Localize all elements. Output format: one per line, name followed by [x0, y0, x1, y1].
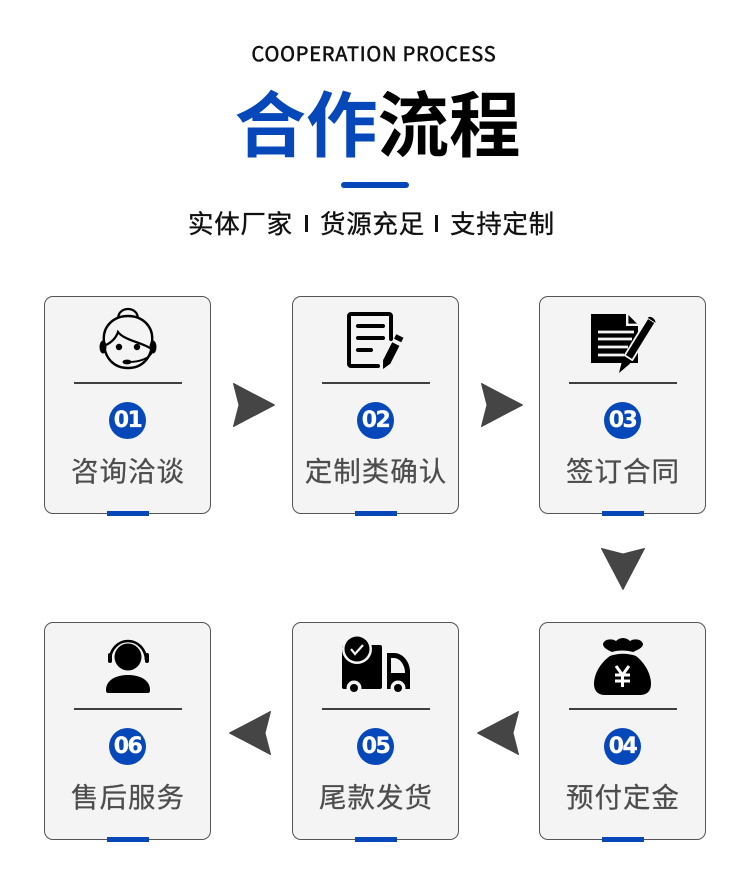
label: 咨询洽谈: [71, 449, 185, 489]
subtitle: [188, 204, 555, 241]
number badge 01: 01: [114, 408, 141, 433]
subtitle: 货源充足: [320, 204, 425, 241]
number badge 02: [357, 402, 394, 439]
panel: step 05 final payment: [292, 622, 459, 840]
number badge 05: 05: [362, 734, 389, 759]
number badge 02: 02: [362, 408, 389, 433]
accent bar: [107, 837, 149, 842]
english heading: COOPERATION PROCESS: [252, 38, 496, 67]
icon: support agent: [106, 640, 150, 693]
label: 售后服务: [71, 775, 185, 815]
accent bar: [107, 511, 149, 516]
icon: document and pen: [347, 312, 404, 369]
number badge 05: [357, 728, 394, 765]
icon: customer service woman: [100, 308, 156, 370]
accent bar: [602, 511, 644, 516]
title: 合作流程: [234, 68, 521, 172]
label: 签订合同: [566, 449, 680, 489]
label: 尾款发货: [319, 775, 433, 815]
icon: contract and pen: [591, 314, 656, 373]
panel: step 03 sign contract: [539, 296, 706, 514]
number badge 01: [109, 402, 146, 439]
label: 定制类确认: [305, 449, 447, 489]
number badge 06: 06: [114, 734, 141, 759]
arrow: left: [477, 711, 519, 755]
accent bar: [355, 837, 397, 842]
number badge 04: 04: [609, 734, 636, 759]
icon: delivery truck: [342, 636, 410, 692]
arrow: down: [601, 548, 645, 590]
subtitle: 实体厂家: [188, 204, 293, 241]
number badge 03: 03: [609, 408, 636, 433]
panel: step 02 customization: [292, 296, 459, 514]
icon: money bag: [594, 638, 651, 695]
number badge 04: [604, 728, 641, 765]
arrow: left: [229, 711, 271, 755]
panel: step 01 consultation: [44, 296, 211, 514]
label: 预付定金: [566, 775, 680, 815]
number badge 03: [604, 402, 641, 439]
arrow: right: [481, 383, 523, 427]
accent bar: [355, 511, 397, 516]
number badge 06: [109, 728, 146, 765]
arrow: right: [233, 383, 275, 427]
panel: step 06 after-sales: [44, 622, 211, 840]
accent bar: [602, 837, 644, 842]
subtitle: 支持定制: [450, 204, 555, 241]
panel: step 04 deposit: [539, 622, 706, 840]
title underline: [341, 182, 409, 188]
